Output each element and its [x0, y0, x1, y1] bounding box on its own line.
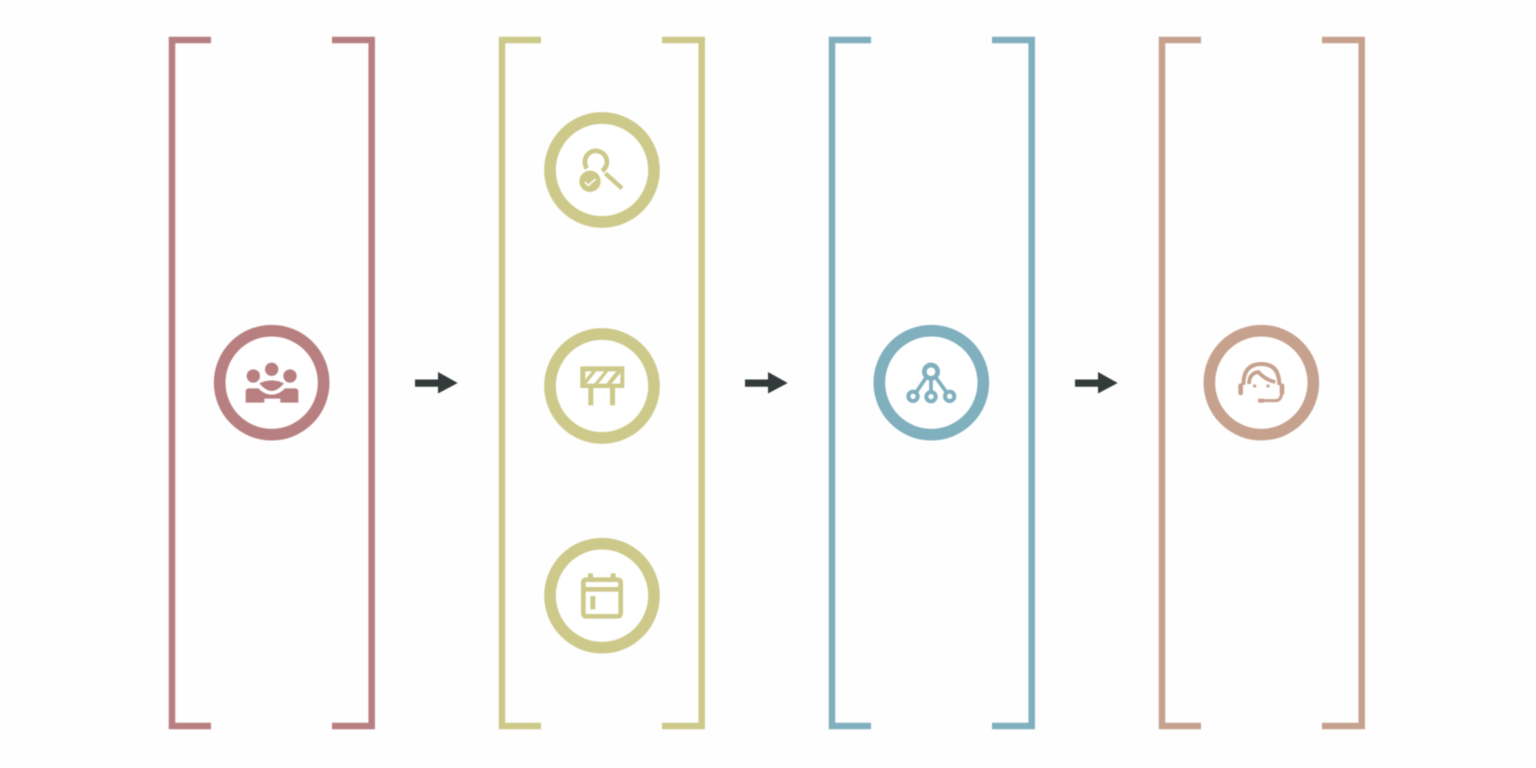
panel: stage 3 network — [832, 40, 1032, 726]
panel: stage 4 support — [1162, 40, 1362, 726]
arrow: stage 3 to stage 4 — [1075, 372, 1118, 394]
bracket pair: stage 1 — [172, 40, 372, 726]
icon: support agent with headset in ring — [1209, 331, 1313, 435]
icon: calendar in ring — [550, 544, 654, 648]
bracket pair: stage 3 — [832, 40, 1032, 726]
arrow: stage 1 to stage 2 — [415, 372, 458, 394]
panel: stage 2 three steps — [502, 40, 702, 726]
icon: hierarchy nodes in ring — [879, 331, 983, 435]
bracket pair: stage 4 — [1162, 40, 1362, 726]
icon: magnifier with check mark in ring — [550, 118, 654, 222]
arrow: stage 2 to stage 3 — [745, 372, 788, 394]
icon: group of people in ring — [220, 331, 324, 435]
panel: stage 1 people — [172, 40, 372, 726]
bracket pair: stage 2 — [502, 40, 702, 726]
icon: road barricade in ring — [550, 334, 654, 438]
